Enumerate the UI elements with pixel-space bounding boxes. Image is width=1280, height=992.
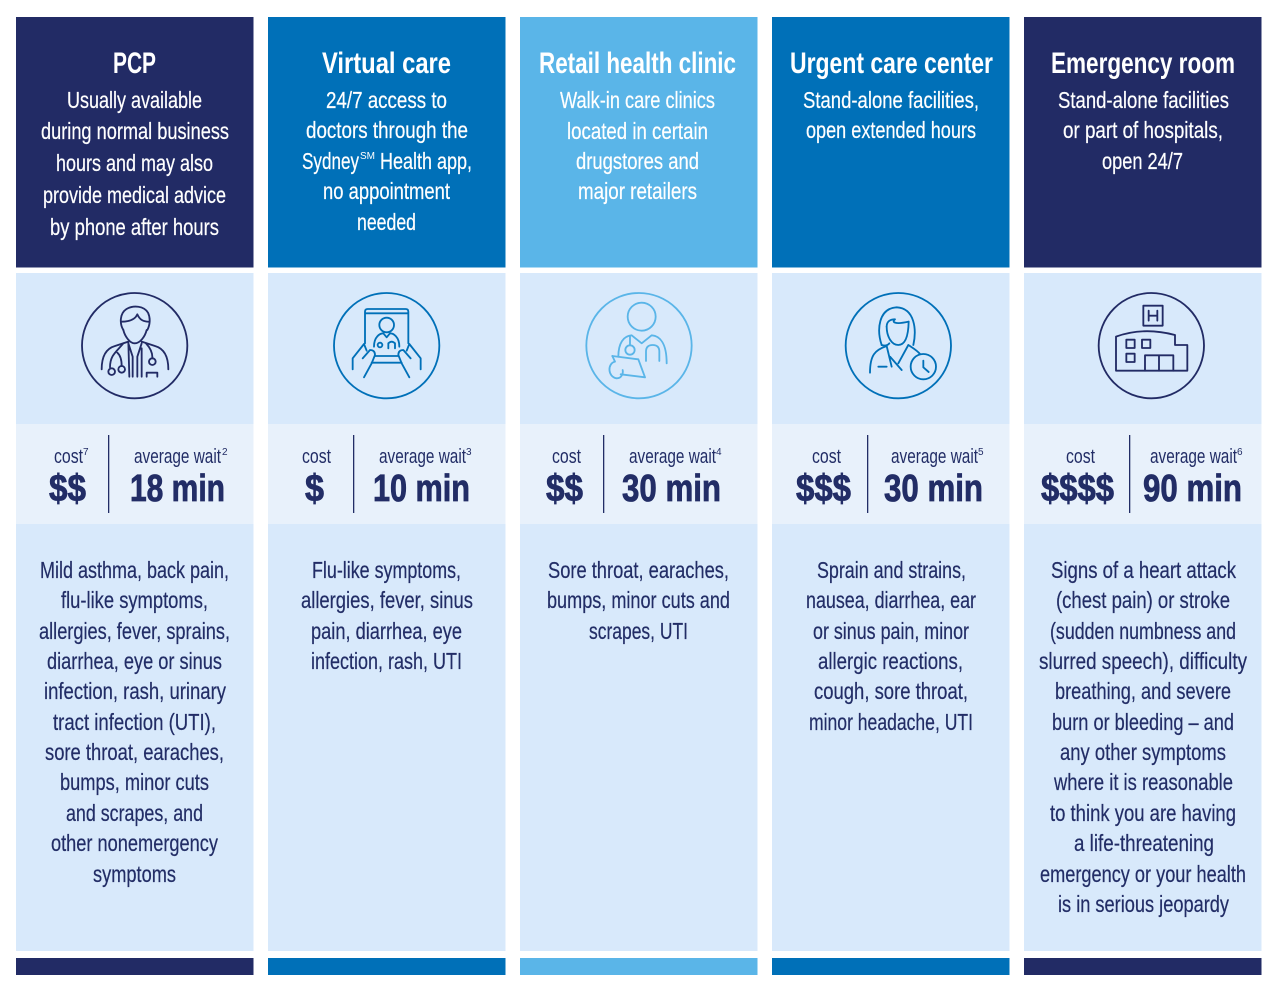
average wait: 18 min bbox=[130, 468, 225, 510]
PCP description: provide medical advice bbox=[43, 182, 226, 208]
average wait: average wait bbox=[629, 446, 716, 468]
Emergency room symptoms: where it is reasonable bbox=[1053, 769, 1233, 795]
panel: Retail health clinic bbox=[520, 17, 758, 975]
average wait bbox=[1143, 446, 1243, 510]
cost: $$ bbox=[546, 468, 583, 510]
Urgent care center description bbox=[803, 87, 979, 143]
Emergency room icon band bbox=[1024, 273, 1262, 424]
Urgent care center cost and wait bbox=[772, 424, 1010, 524]
PCP symptoms: other nonemergency bbox=[51, 830, 218, 856]
icon: male doctor bbox=[82, 293, 187, 398]
Virtual care symptoms: Flu-like symptoms, bbox=[312, 557, 461, 583]
PCP symptoms: symptoms bbox=[93, 861, 176, 887]
panel: PCP bbox=[16, 17, 254, 975]
Virtual care header bbox=[268, 17, 506, 268]
average wait: average wait bbox=[891, 446, 978, 468]
Virtual care cost and wait bbox=[268, 424, 506, 524]
Urgent care center description: Stand-alone facilities, bbox=[803, 87, 979, 113]
Retail health clinic description: major retailers bbox=[578, 178, 697, 204]
panel: Virtual care bbox=[268, 17, 506, 975]
Urgent care center symptoms: allergic reactions, bbox=[818, 648, 963, 674]
average wait bbox=[130, 446, 228, 510]
Virtual care symptoms bbox=[268, 524, 506, 951]
Urgent care center symptoms: Sprain and strains, bbox=[817, 557, 966, 583]
Virtual care icon band bbox=[268, 273, 506, 424]
Retail health clinic symptoms bbox=[520, 524, 758, 951]
cost bbox=[1041, 446, 1114, 510]
Emergency room symptoms: Signs of a heart attack bbox=[1051, 557, 1236, 583]
icon: doctor on tablet bbox=[334, 293, 439, 398]
PCP description: hours and may also bbox=[56, 150, 213, 176]
PCP symptoms: infection, rash, urinary bbox=[44, 678, 226, 704]
Urgent care center title: Urgent care center bbox=[790, 47, 993, 80]
Retail health clinic description bbox=[560, 87, 715, 204]
Retail health clinic footer bar bbox=[520, 958, 758, 975]
Virtual care symptoms: pain, diarrhea, eye bbox=[311, 618, 462, 644]
PCP description: during normal business bbox=[41, 118, 229, 144]
Emergency room symptoms: to think you are having bbox=[1050, 800, 1236, 826]
Urgent care center symptoms: or sinus pain, minor bbox=[813, 618, 969, 644]
cost: $$ bbox=[49, 468, 86, 510]
cost bbox=[546, 446, 583, 510]
average wait: 10 min bbox=[373, 468, 470, 510]
average wait bbox=[884, 446, 984, 510]
Urgent care center symptoms: cough, sore throat, bbox=[814, 678, 968, 704]
cost: 7 bbox=[83, 447, 89, 458]
PCP symptoms: bumps, minor cuts bbox=[60, 769, 209, 795]
Urgent care center symptoms bbox=[772, 524, 1010, 951]
average wait: average wait bbox=[1150, 446, 1237, 468]
cost: cost bbox=[552, 446, 581, 468]
Retail health clinic title: Retail health clinic bbox=[539, 47, 736, 80]
average wait: 4 bbox=[716, 447, 722, 458]
average wait: 5 bbox=[978, 447, 984, 458]
Virtual care description: Sydney bbox=[302, 148, 359, 174]
PCP description: Usually available bbox=[67, 87, 202, 113]
PCP footer bar bbox=[16, 958, 254, 975]
Emergency room description: or part of hospitals, bbox=[1063, 117, 1223, 143]
Retail health clinic header bbox=[520, 17, 758, 268]
PCP description bbox=[41, 87, 229, 240]
average wait: 90 min bbox=[1143, 468, 1242, 510]
PCP symptoms: allergies, fever, sprains, bbox=[39, 618, 230, 644]
PCP symptoms: and scrapes, and bbox=[66, 800, 203, 826]
panel: Emergency room bbox=[1024, 17, 1262, 975]
Emergency room symptoms: any other symptoms bbox=[1060, 739, 1226, 765]
cost bbox=[302, 446, 331, 510]
Virtual care symptoms: allergies, fever, sinus bbox=[301, 587, 473, 613]
PCP symptoms: flu-like symptoms, bbox=[61, 587, 208, 613]
Virtual care description: no appointment bbox=[323, 178, 450, 204]
Retail health clinic symptoms: bumps, minor cuts and bbox=[547, 587, 730, 613]
average wait: 30 min bbox=[884, 468, 983, 510]
Urgent care center header bbox=[772, 17, 1010, 268]
Retail health clinic cost and wait bbox=[520, 424, 758, 524]
average wait: 30 min bbox=[622, 468, 721, 510]
average wait: 3 bbox=[466, 447, 472, 458]
Emergency room description bbox=[1058, 87, 1229, 174]
Retail health clinic symptoms: Sore throat, earaches, bbox=[548, 557, 729, 583]
Urgent care center symptoms: nausea, diarrhea, ear bbox=[806, 587, 976, 613]
Retail health clinic icon band bbox=[520, 273, 758, 424]
average wait bbox=[373, 446, 472, 510]
cost bbox=[49, 446, 89, 510]
cost bbox=[796, 446, 851, 510]
Emergency room symptoms bbox=[1024, 524, 1262, 951]
cost: $$$$ bbox=[1041, 468, 1114, 510]
PCP icon band bbox=[16, 273, 254, 424]
Virtual care description: doctors through the bbox=[306, 117, 468, 143]
average wait bbox=[622, 446, 722, 510]
cost: cost bbox=[1066, 446, 1095, 468]
Emergency room cost and wait bbox=[1024, 424, 1262, 524]
Emergency room description: Stand-alone facilities bbox=[1058, 87, 1229, 113]
Emergency room symptoms: breathing, and severe bbox=[1055, 678, 1231, 704]
Emergency room header bbox=[1024, 17, 1262, 268]
average wait: average wait bbox=[379, 446, 466, 468]
average wait: average wait bbox=[134, 446, 221, 468]
cost: cost bbox=[302, 446, 331, 468]
Urgent care center icon band bbox=[772, 273, 1010, 424]
Emergency room symptoms: is in serious jeopardy bbox=[1058, 891, 1229, 917]
PCP title: PCP bbox=[113, 47, 156, 80]
Urgent care center symptoms: minor headache, UTI bbox=[809, 709, 973, 735]
PCP symptoms: sore throat, earaches, bbox=[45, 739, 224, 765]
icon: female doctor with clock bbox=[846, 293, 951, 398]
PCP symptoms: tract infection (UTI), bbox=[53, 709, 216, 735]
Virtual care symptoms: infection, rash, UTI bbox=[311, 648, 462, 674]
PCP symptoms: Mild asthma, back pain, bbox=[40, 557, 229, 583]
Emergency room symptoms: a life-threatening bbox=[1074, 830, 1214, 856]
average wait: 6 bbox=[1237, 447, 1243, 458]
Retail health clinic description: located in certain bbox=[567, 118, 708, 144]
Virtual care footer bar bbox=[268, 958, 506, 975]
PCP cost and wait bbox=[16, 424, 254, 524]
Urgent care center footer bar bbox=[772, 958, 1010, 975]
Retail health clinic description: Walk-in care clinics bbox=[560, 87, 715, 113]
Virtual care title: Virtual care bbox=[322, 47, 451, 80]
Virtual care description: needed bbox=[357, 209, 416, 235]
Virtual care description: 24/7 access to bbox=[326, 87, 447, 113]
Virtual care description: Health app, bbox=[380, 148, 472, 174]
Emergency room description: open 24/7 bbox=[1102, 148, 1183, 174]
Urgent care center description: open extended hours bbox=[806, 117, 976, 143]
Emergency room symptoms: (chest pain) or stroke bbox=[1056, 587, 1230, 613]
PCP description: by phone after hours bbox=[50, 214, 219, 240]
cost: cost bbox=[54, 446, 83, 468]
Virtual care description bbox=[302, 87, 472, 235]
cost: cost bbox=[812, 446, 841, 468]
Retail health clinic description: drugstores and bbox=[576, 148, 699, 174]
Emergency room footer bar bbox=[1024, 958, 1262, 975]
average wait: 2 bbox=[222, 447, 228, 458]
icon: doctor with clipboard bbox=[586, 293, 692, 398]
PCP symptoms: diarrhea, eye or sinus bbox=[47, 648, 222, 674]
icon: hospital building bbox=[1099, 293, 1204, 398]
PCP symptoms bbox=[16, 524, 254, 951]
PCP header bbox=[16, 17, 254, 268]
panel: Urgent care center bbox=[772, 17, 1010, 975]
cost: $ bbox=[305, 468, 324, 510]
Emergency room symptoms: burn or bleeding – and bbox=[1052, 709, 1234, 735]
Virtual care description: SM bbox=[360, 151, 375, 162]
Retail health clinic symptoms: scrapes, UTI bbox=[589, 618, 688, 644]
cost: $$$ bbox=[796, 468, 851, 510]
